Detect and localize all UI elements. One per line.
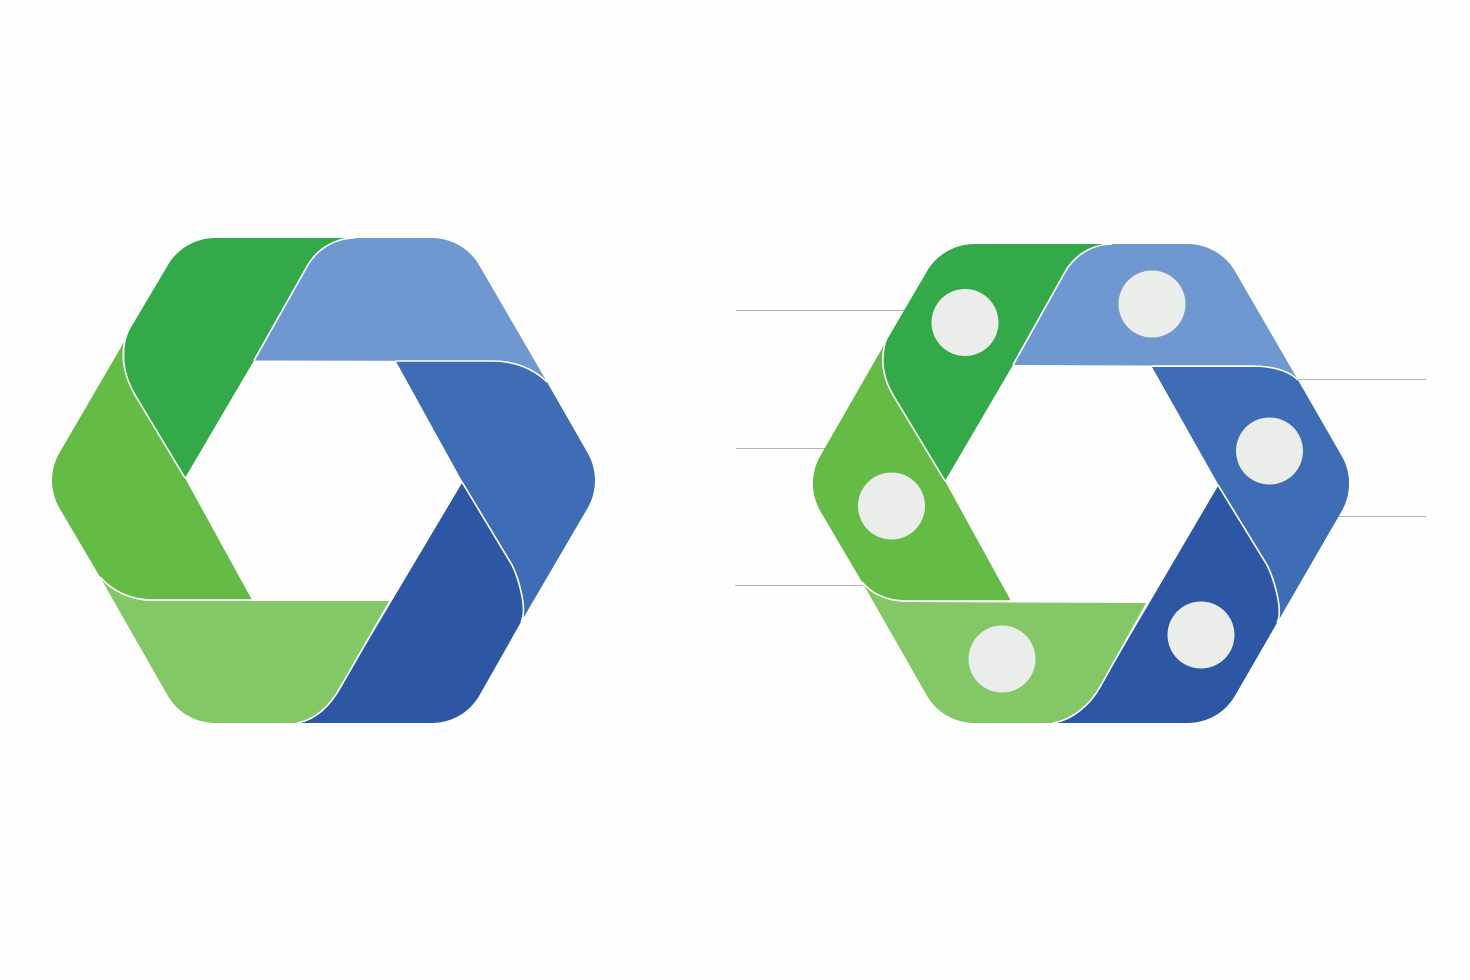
segment: dark blue: [297, 483, 523, 723]
segment: mid green with badge: [813, 345, 1011, 601]
segment: light green: [100, 577, 390, 723]
segment: dark blue with badge: [1053, 486, 1279, 723]
segment: mid green: [52, 342, 252, 600]
segment: light blue: [254, 238, 547, 382]
left hexagon diagram: [52, 238, 595, 723]
badge: dark green: [932, 289, 998, 356]
badge: mid blue: [1236, 418, 1303, 484]
segment: light green with badge: [862, 582, 1147, 723]
segment: light blue with badge: [1013, 244, 1298, 380]
segment: mid blue: [396, 361, 595, 622]
segment: mid blue with badge: [1152, 367, 1349, 623]
leader lines: [735, 310, 1426, 586]
white seams: [862, 244, 1298, 723]
right hexagon diagram with callouts: [735, 244, 1426, 723]
badge: dark blue: [1168, 602, 1234, 668]
badge: mid green: [858, 472, 925, 540]
badge: light blue: [1118, 270, 1186, 338]
badge: light green: [968, 626, 1036, 692]
segment: dark green: [124, 238, 355, 478]
white seams: [100, 238, 547, 723]
segment: dark green with badge: [883, 244, 1112, 481]
